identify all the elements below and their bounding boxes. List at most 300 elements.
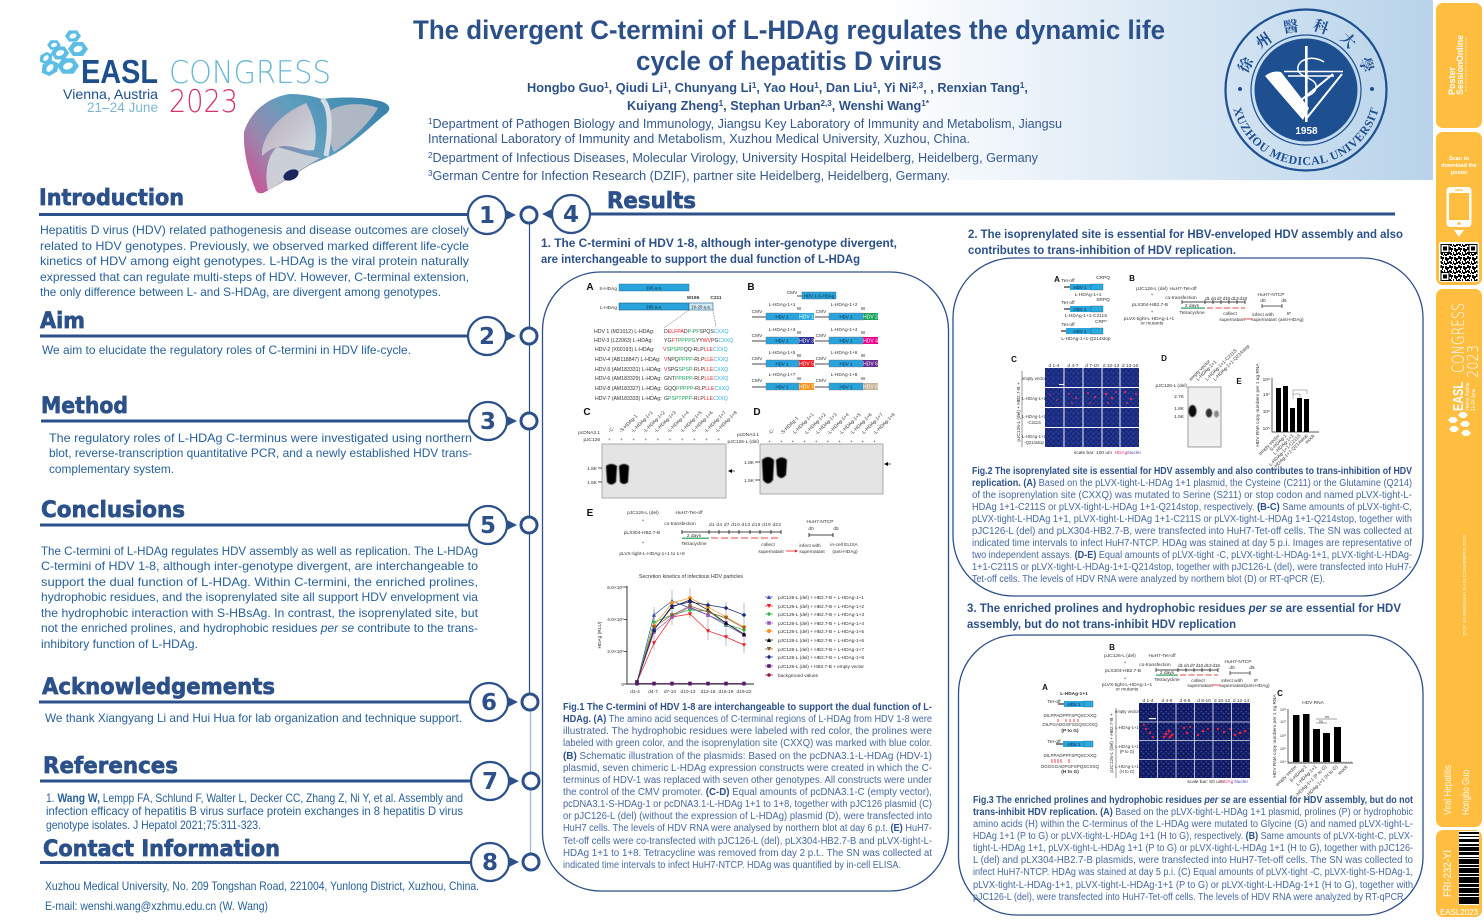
figure 2B: timeline: d5 — [1281, 298, 1287, 304]
authors: , Chunyang Li — [668, 81, 752, 95]
figure 2C: immunofluorescence grid: L-HDAg-1+1 — [1022, 396, 1046, 401]
figure 1E: experimental timeline: supernatant — [799, 549, 825, 555]
figure 2A: constructs: L-HDAg-1+1 — [1075, 292, 1102, 298]
result 2 heading: contributes to trans-inhibition of HDV replication. — [968, 243, 1236, 257]
figure 1C: northern blot: pcDNA3.1 — [578, 430, 600, 436]
figure 3B: timeline: supernatant — [1187, 683, 1213, 689]
figure 2B: timeline: HuH7-Tet-off — [1169, 286, 1197, 292]
figure 3A: mutation schematic: Tet-off — [1047, 699, 1061, 705]
figure 2B: timeline: pLVX-tight-L-HDAg-1+1 — [1124, 316, 1175, 322]
figure 3A: mutation schematic: DILPPADPPFSPQSCXXQ — [1044, 753, 1097, 758]
figure 1C: northern blot: -L-HDAg-1+3 — [653, 410, 678, 434]
figure 3B: immunofluorescence grid: L-HDAg-1+1 — [1115, 764, 1139, 769]
figure 3B: timeline: B — [1109, 643, 1115, 652]
plasmid columns: L-HDAg-1+2 — [831, 302, 858, 308]
figure 3A: mutation schematic: DILPPADPPFSPQSCXXQ — [1044, 713, 1097, 718]
figure 2C: immunofluorescence grid: L-HDAg-1+1 — [1022, 434, 1046, 439]
figure 3B: immunofluorescence grid: d 6-8 — [1180, 698, 1191, 704]
figure 1E: experimental timeline: pJC126-L (del) — [627, 510, 659, 516]
figure 1D: northern blot: 1.8K — [744, 460, 755, 466]
figure 1D: northern blot: -L-HDAg-1+8 — [872, 412, 897, 436]
figure 1 caption: indicated time intervals to infect HuH7-NTCP. HDAg was quantified by in-cell ELISA. — [563, 860, 901, 871]
plasmid columns: W — [861, 353, 866, 359]
section: introduction — [39, 186, 537, 299]
figure 2 caption: of the isoprenylation site (CXXQ) was mutated to Serine (S211) or stop codon and named pLVX-tight-L- — [972, 490, 1412, 501]
figure 1C: northern blot: -L-HDAg-1+4 — [666, 410, 691, 434]
figure 1D: northern blot: -C- — [767, 427, 776, 436]
figure 3B: immunofluorescence grid: d 12-14 — [1233, 698, 1249, 704]
figure 1D: northern blot: 1.5K — [744, 478, 755, 484]
figure 1E: secretion kinetics line chart: Secretion kinetics of infectious HDV particles — [639, 574, 743, 580]
figure 3B: timeline: or mutants — [1116, 686, 1139, 692]
figure 2C: immunofluorescence grid: d 13-16 — [1122, 363, 1138, 369]
figure 3 caption: infect HuH7-NTCP. HDAg was stained at day 5 p.i. (C) Equal amounts of pLVX-tight -C, pLVX-tight-S-HDAg-1, — [973, 867, 1413, 878]
figure 1E: experimental timeline: pLX304-HB2.7-B — [624, 530, 660, 536]
figure 2 caption: pLVX-tight-L-HDAg 1+1, pLVX-tight-L-HDAg 1+1-C211S or pLVX-tight-L-HDAg 1+1-Q214stop, together with — [972, 514, 1412, 525]
figure 2C: immunofluorescence grid: Nuclei — [1127, 450, 1141, 456]
marker 5: 5 — [480, 513, 496, 539]
figure 2C: immunofluorescence grid: scale bar: 100 um — [1074, 450, 1112, 456]
plasmid columns: L-HDAg-1+7 — [769, 372, 796, 378]
figure 2B: timeline: pJC126-L (del) — [1136, 286, 1168, 292]
figure 1E: experimental timeline: 2 days — [687, 533, 702, 539]
figure 3 caption: L (del) and pLX304-HB2.7-B plasmids, were transfected into HuH7-Tet-off cells. The SN was collected to — [973, 855, 1413, 866]
chart legend: pJC126-L (del) + HB2.7-B + L-HDAg-1+5 — [778, 629, 864, 635]
affiliations: 1 — [428, 117, 433, 126]
figure 1E: experimental timeline — [587, 508, 859, 557]
result 3 heading: assembly, but do not trans-inhibit HDV replication — [967, 617, 1236, 631]
authors: 1 — [1020, 81, 1025, 90]
figure 2E: bar chart: 10⁷ — [1263, 392, 1270, 398]
result 3 heading — [967, 601, 1401, 631]
section: conclusions: hydrophobic residues, and the isoprenylated site all support HDV envelopment via — [41, 590, 478, 604]
figure 3C: bar chart: 10⁵ — [1280, 746, 1286, 751]
figure 3B: timeline: Tetracycline — [1154, 677, 1180, 683]
figure 1E: secretion kinetics line chart: 6.0×10⁶ — [607, 585, 624, 591]
marker 3: 3 — [480, 409, 496, 435]
figure 2A: constructs: Tet-off — [1061, 300, 1075, 306]
barcode — [1459, 831, 1479, 905]
figure 3C: bar chart: 10⁸ — [1280, 707, 1286, 712]
figure 2B: timeline: or mutants — [1141, 320, 1164, 326]
plasmid columns: CMV — [816, 378, 827, 384]
authors: , Stephan Urban — [723, 99, 820, 113]
authors: , Qiudi Li — [609, 81, 663, 95]
figure 1A: sequence alignment: S-HDAg — [599, 286, 617, 292]
section: aim: Aim — [40, 309, 85, 334]
result 1 heading — [541, 236, 897, 266]
section: introduction: kinetics of HDV among eight genotypes. L-HDAg is the viral protein naturally — [40, 254, 469, 268]
figure 2D: northern blot: 1.8K — [1174, 406, 1185, 412]
figure 2E: bar chart: 10⁶ — [1263, 409, 1270, 415]
figure 3C: bar chart: L-HDAg-1+1 (P to G) — [1292, 764, 1329, 800]
marker 6 — [470, 683, 538, 721]
figure 1E: secretion kinetics line chart: d4-7 — [648, 689, 658, 695]
figure 1 caption: terminus of HDV-1 was replaced with seven other genotypes. All constructs were under — [563, 775, 933, 786]
section: contact information: Xuzhou Medical University, No. 209 Tongshan Road, 221004, Yunlong District, Xuzhou, China. — [45, 879, 479, 893]
affiliations: International Laboratory of Immunity and Metabolism, Xuzhou Medical University, Xuzhou, China. — [428, 132, 970, 146]
plasmid columns: W — [797, 330, 802, 336]
figure 2A: constructs: HDV 1 — [1074, 329, 1087, 334]
plasmid columns: W — [797, 376, 802, 382]
figure 1C: northern blot: pJC126 — [583, 437, 600, 443]
figure 2B: timeline: + — [1151, 293, 1154, 298]
figure 3B: immunofluorescence grid: HDAg — [1221, 779, 1234, 785]
section: introduction: Introduction — [39, 186, 184, 211]
figure 1 caption: or pJC126-L (del) (without the expression of L-HDAg) plasmid (D), were transfected into — [563, 811, 932, 822]
figure 1A: sequence alignment: HDV-4 (AB118847) L-HDAg: — [595, 357, 660, 363]
figure 1A: sequence alignment: VSPSPPQQ-RLPLLECXXQ — [663, 347, 728, 353]
figure 1A: sequence alignment: GPSPTPPP-RLPLLECXXQ — [664, 396, 728, 402]
figure 2D: northern blot: L-HDAg-1+1-Q214stop — [1212, 343, 1251, 382]
figure 1C: northern blot: 1.8K — [587, 466, 598, 472]
figure 3C: bar chart: ns — [1319, 718, 1323, 724]
plasmid columns: W — [861, 306, 866, 312]
figure 1A: sequence alignment: HDV 1 (M21012) L-HDAg: — [594, 329, 654, 335]
figure 3B: timeline: HuH7-Tet-off — [1148, 653, 1176, 659]
figure 3A: mutation schematic: L-HDAg-1+1 — [1060, 691, 1088, 697]
plasmid columns: CMV — [752, 378, 763, 384]
figure 2E: bar chart: empty vector — [1258, 433, 1282, 457]
authors: 2,3 — [820, 99, 832, 108]
figure 3C: bar chart: L-HDAg-1+1 (H to G) — [1303, 764, 1340, 800]
figure 3B: timeline: d5 — [1249, 665, 1255, 671]
figure 1D: northern blot: pJC126-L (del) — [727, 439, 759, 445]
figure 1 caption: Fig.1 The C-termini of HDV 1-8 are interchangeable to support the dual function of L- — [563, 702, 932, 713]
sidebar: EASL congress tab: Vienna, Austria — [1465, 382, 1471, 411]
figure 2B: timeline: Tetracycline — [1179, 310, 1205, 316]
sidebar: poster session online tab — [1436, 3, 1482, 128]
figure 2C: immunofluorescence grid: pJC126-L (del) + HB2.7-B + — [1016, 382, 1022, 442]
EASL Congress logo: 2023 — [169, 84, 238, 120]
figure 2D: northern blot: empty vector — [1188, 358, 1212, 382]
figure 2D: northern blot: pJC126-L (del) — [1155, 383, 1187, 389]
section: method: blot, reverse-transcription quantitative PCR, and a newly established HDV trans- — [49, 446, 472, 460]
figure 3B: timeline: + — [1124, 661, 1127, 666]
figure 1 caption: plasmid, seven chimeric L-HDAg expression constructs were created in which the C- — [563, 763, 932, 774]
figure 1E: experimental timeline: infect with — [799, 543, 821, 549]
section: conclusions: not the enriched prolines, and hydrophobic residues per se contribute to the trans- — [41, 621, 478, 635]
section: introduction: related to HDV genotypes. Previously, we observed marked different life-cycle — [40, 239, 469, 253]
marker 1 — [468, 196, 537, 234]
figure 1B: plasmid schematic — [747, 282, 878, 390]
figure 1D: northern blot: -L-HDAg-1+1 — [791, 412, 816, 436]
plasmid columns — [752, 302, 878, 390]
plasmid columns: HDV 1 — [799, 314, 814, 320]
figure 3B: timeline: 2 days — [1160, 670, 1175, 676]
sidebar: abstract ID tab with barcode — [1436, 830, 1482, 917]
title: The divergent C-termini of L-HDAg regulates the dynamic life — [413, 15, 1165, 45]
figure 1C: northern blot: -L-HDAg-1+5 — [679, 410, 704, 434]
plasmid columns: HDV 2 — [863, 314, 878, 320]
figure 1E: experimental timeline: + — [642, 519, 645, 524]
figure 1A: sequence alignment: GNTPPRPP-RLPLLECXXQ — [664, 376, 728, 382]
authors: Kuiyang Zheng — [627, 99, 717, 113]
plasmid columns: L-HDAg-1+5 — [769, 350, 796, 356]
plasmid columns: HDV 1 — [840, 362, 853, 366]
icon: liver illustration — [244, 94, 389, 193]
figure 2E: bar chart: E — [1236, 377, 1242, 386]
icon: hexagon cluster — [37, 30, 88, 79]
figure 2B: timeline: HuH7-NTCP — [1258, 292, 1284, 298]
figure 2 caption: replication. (A) Based on the pLVX-tight-L-HDAg 1+1 plasmid, the Cysteine (C211) or the Glutamine (Q214) — [972, 478, 1412, 489]
title: cycle of hepatitis D virus — [636, 46, 942, 76]
figure 1A: sequence alignment: 195 a.a. — [646, 304, 662, 310]
figure 3C: bar chart: C — [1277, 689, 1283, 698]
section: conclusions: the hydrophobic interaction with S-HBsAg. In contrast, the isoprenylated site, but — [41, 606, 479, 620]
figure 2C: immunofluorescence grid: HDAg — [1115, 450, 1128, 456]
figure 1C: northern blot: + + + + + + + + + + — [608, 438, 720, 443]
figure 1 caption: Tet-off cells were co-transfected with pJC126-L (del), pLX304-HB2.7-B and pLVX-tight-L- — [563, 836, 932, 847]
figure 1C: northern blot: -S-HDAg-1 — [618, 413, 639, 434]
figure 1A: sequence alignment: VNPQPPPP-RLPLLECXXQ — [664, 357, 728, 363]
sidebar: EASL congress tab: CONGRESS — [1449, 303, 1469, 373]
figure 2A: constructs: HDV 1 — [1074, 285, 1087, 290]
sidebar: EASL congress tab: 2023 — [1464, 345, 1482, 378]
figure 3A: mutation schematic: A — [1042, 683, 1048, 692]
figure 3C: bar chart: 10⁶ — [1280, 733, 1286, 738]
result 2 heading — [968, 227, 1403, 257]
figure 3A: mutation schematic: (H to G) — [1061, 769, 1079, 775]
authors: 1* — [921, 99, 930, 108]
authors: 1 — [752, 81, 757, 90]
chart legend: background values — [778, 673, 819, 679]
figure 1A: sequence alignment — [586, 282, 733, 402]
figure 2 caption: two independent assays. (D-E) Equal amounts of pLVX-tight -C, pLVX-tight-L-HDAg-1+1, pLVX-tight-L-HDAg- — [972, 550, 1412, 561]
figure 3C: bar chart: empty vector — [1275, 764, 1299, 788]
section: method — [41, 394, 537, 476]
EASL Congress logo — [37, 30, 331, 120]
figure 2B: timeline: 2 days — [1185, 303, 1200, 309]
marker 6: 6 — [481, 690, 497, 716]
figure 1 caption: (B) Schematic illustration of the plasmids: Based on the pcDNA3.1-L-HDAg (HDV-1) — [563, 751, 932, 762]
figure 2B: timeline: co-transfection — [1165, 295, 1197, 301]
figure 3B: timeline: d0 — [1229, 665, 1235, 671]
section: method: complementary system. — [49, 462, 174, 476]
figure 3C: bar chart: L-HDAg-1+1 — [1295, 764, 1319, 787]
figure 2D: northern blot: D — [1161, 354, 1167, 363]
plasmid columns: HDV 1 — [776, 384, 789, 390]
figure 3A: mutation schematic: HDV 1 — [1068, 742, 1081, 747]
section: references: genotype isolates. J Hepatol 2021;75:311-323. — [46, 818, 261, 832]
plasmid columns: L-HDAg-1+3 — [769, 327, 796, 333]
figure 3 caption — [973, 795, 1414, 903]
figure 2E: bar chart: 10⁸ — [1263, 377, 1270, 383]
figure 2B: timeline: collect — [1223, 311, 1237, 317]
figure 1D: northern blot: -L-HDAg-1+3 — [814, 412, 839, 436]
figure 2C: immunofluorescence grid: L-HDAg-1+1 — [1022, 414, 1046, 419]
marker 2 — [468, 317, 537, 355]
figure 2B: timeline: B — [1129, 274, 1135, 283]
plasmid columns: HDV 1 — [776, 362, 789, 366]
figure 1A: sequence alignment: VSPGSPSP-RLPLLECXXQ — [664, 367, 728, 373]
figure 3B: timeline: pJC126-L (del) — [1104, 653, 1136, 659]
authors: Hongbo Guo — [527, 81, 603, 95]
plasmid columns: HDV 1 — [840, 384, 853, 390]
plasmid columns: L-HDAg-1+6 — [831, 350, 858, 356]
marker 4: 4 — [563, 202, 579, 228]
plasmid columns: W — [861, 376, 866, 382]
figure 1A: sequence alignment: HDV-6 (AM183329) L-HDAg: — [595, 376, 662, 382]
section: conclusions: The C-termini of L-HDAg regulates HDV assembly as well as replication. The L-HDAg — [41, 544, 478, 558]
sidebar: scan to download tab: Scan to — [1449, 156, 1470, 162]
marker 7: 7 — [482, 769, 498, 795]
figure 2C: immunofluorescence grid: d 4-7 — [1068, 363, 1079, 369]
figure 3C: bar chart: 10⁴ — [1280, 759, 1286, 764]
figure 3B: timeline: collect — [1191, 678, 1205, 684]
figure 1E: secretion kinetics line chart: d7-10 — [664, 689, 676, 695]
figure 2C: immunofluorescence grid: -Q214stop — [1024, 440, 1044, 445]
figure 1E: experimental timeline: d5 — [833, 526, 839, 532]
figure 2 caption: HDAg 1+1-C211S or pLVX-tight-L-HDAg 1+1-Q214stop, respectively. (B-C) Same amounts of pLVX-tight-C, — [972, 502, 1412, 513]
figure 2 caption: Tet-off cells. The levels of HDV RNA were analyzed by northern blot (D) or RT-qPCR (E). — [972, 574, 1325, 585]
figure 1E: secretion kinetics line chart: HDAg (RLU) — [597, 621, 603, 648]
figure 1 caption: HuH7 cells. The levels of HDV RNA were analysed by northern blot at day 6 p.t. (E) HuH7- — [563, 823, 932, 834]
figure 2A: constructs: Tet-off — [1061, 278, 1075, 284]
figure 2B: timeline: IF — [1287, 311, 1291, 317]
authors: 1 — [719, 99, 724, 108]
sidebar: EASL congress tab: DOI: 10.5582/pson.EASLCONGRESS.2023 — [1462, 534, 1467, 635]
figure 1E: experimental timeline: Tetracycline — [681, 541, 707, 547]
chart legend: pJC126-L (del) + HB2.7-B + L-HDAg-1+6 — [778, 638, 864, 644]
figure 3B: immunofluorescence grid: d 10-12 — [1214, 698, 1230, 704]
authors: , Yi Ni — [877, 81, 912, 95]
plasmid columns: HDV 3 — [799, 338, 814, 344]
figure 1A: sequence alignment: HDV-2 (X60193) L-HDAg: — [595, 347, 654, 353]
figure 3B: timeline — [1102, 643, 1270, 692]
figure 3 caption: pLVX-tight-L-HDAg-1+1, pLVX-tight-L-HDAg-1+1 (P to G) or pLVX-tight-L-HDAg-1+1 (H to G), together with — [973, 880, 1413, 891]
figure 2D: northern blot: 2.7K — [1174, 394, 1185, 400]
figure 2B: timeline: d0 — [1260, 298, 1266, 304]
plasmid columns: HDV 1 — [776, 338, 789, 344]
icon: phone — [1446, 187, 1472, 227]
figure 1A: sequence alignment: GQQPPPPP-RLPLLECXXQ — [664, 386, 729, 392]
figure 2E: bar chart: L-HDAg-1+1-C211S — [1268, 433, 1302, 468]
figure 3 caption: trans-inhibit HDV replication. (A) Based on the pLVX-tight-L-HDAg 1+1 plasmid, prolines (P) or hydrophobic — [973, 807, 1413, 818]
figure 3B: timeline: supernatant — [1219, 683, 1245, 689]
figure 2D: northern blot: 1.5K — [1174, 414, 1185, 420]
figure 1D: northern blot — [727, 407, 897, 494]
figure 1E: secretion kinetics line chart: d19-22 — [737, 689, 752, 695]
marker 3 — [469, 402, 537, 440]
figure 3B: immunofluorescence grid: L-HDAg-1+1 — [1115, 725, 1139, 730]
marker 7 — [471, 762, 539, 800]
section: conclusions — [40, 498, 537, 651]
section: introduction: the only difference between L- and S-HDAg, are divergent among genotypes. — [40, 285, 441, 299]
figure 3B: immunofluorescence grid: empty vector — [1115, 709, 1140, 714]
figure 3 caption: Fig.3 The enriched prolines and hydrophobic residues per se are essential for HDV assembly, but do not — [973, 795, 1414, 806]
figure 1E: experimental timeline: in-cell ELISA — [830, 542, 859, 548]
figure 1D: northern blot: + + + + + + + + + + — [768, 440, 876, 445]
chart legend: pJC126-L (del) + HB2.7-B + L-HDAg-1+7 — [778, 647, 864, 653]
section: contact information: E-mail: wenshi.wang@xzhmu.edu.cn (W. Wang) — [45, 899, 268, 913]
authors — [527, 81, 1028, 113]
affiliations — [428, 117, 1062, 183]
sidebar: EASL congress tab — [1436, 289, 1482, 827]
figure 1E: experimental timeline: E — [587, 508, 594, 519]
figure 2 caption — [972, 466, 1412, 585]
marker 2: 2 — [479, 324, 495, 350]
figure 3C: bar chart: HDV RNA — [1302, 700, 1325, 706]
section: conclusions: C-termini of HDV 1-8, although inter-genotype divergent, are interchangeable to — [41, 559, 478, 573]
sidebar: abstract ID tab with barcode: FRI-232-YI — [1442, 850, 1454, 897]
figure 1D: northern blot: -S-HDAg-1 — [779, 415, 800, 436]
figure 1 caption: illustrated. The hydrophobic residues were labeled with red color, the prolines were — [563, 726, 932, 737]
section: method: The regulatory roles of L-HDAg C-terminus were investigated using northern — [49, 431, 472, 445]
chart legend: pJC126-L (del) + HB2.7-B + L-HDAg-1+3 — [778, 612, 864, 618]
figure 1C: northern blot: C — [583, 407, 591, 418]
figure 2A: constructs: CRP* — [1095, 319, 1107, 325]
affiliations: 3 — [428, 169, 433, 178]
marker 1: 1 — [479, 203, 495, 229]
figure 1E: experimental timeline: pLVX-tight-L-HDAg-1+1 to 1+8 — [619, 551, 685, 557]
plasmid columns: CMV — [752, 309, 763, 315]
figure 1D: northern blot: D — [753, 407, 761, 418]
figure 1E: secretion kinetics line chart: d1-4 — [630, 689, 640, 695]
section: acknowledgements — [39, 675, 538, 725]
section: conclusions: Conclusions — [41, 498, 185, 523]
title — [413, 15, 1165, 76]
affiliations: Department of Pathogen Biology and Immunology, Jiangsu Key Laboratory of Immunity and Metabolism, Jiangsu — [432, 117, 1062, 131]
figure 1E: experimental timeline: supernatant — [758, 549, 784, 555]
marker 5 — [469, 506, 537, 544]
sidebar: scan to download tab: poster — [1451, 170, 1468, 176]
figure 1E: secretion kinetics line chart: 4.0×10⁶ — [607, 617, 624, 623]
plasmid columns: CMV — [816, 309, 827, 315]
figure 2E: bar chart — [1236, 363, 1319, 472]
chart legend: pJC126-L (del) + HB2.7-B + L-HDAg-1+4 — [778, 621, 864, 627]
QR code — [1439, 242, 1479, 282]
result 2 heading: 2. The isoprenylated site is essential for HBV-enveloped HDV assembly and also — [968, 227, 1403, 241]
figure 2 caption: indicated time intervals to infect HuH7-NTCP. HDAg was stained at day 5 p.i. Images are representative of — [972, 538, 1412, 549]
chart legend: pJC126-L (del) + HB2.7-B + L-HDAg-1+1 — [778, 595, 864, 601]
figure 1C: northern blot — [578, 407, 739, 498]
plasmid columns: CMV — [752, 356, 763, 362]
figure 1A: sequence alignment: W196 — [687, 295, 700, 301]
figure 3C: bar chart: 10⁷ — [1280, 719, 1287, 724]
section: method: Method — [41, 394, 128, 419]
sidebar: EASL congress tab: EASL — [1450, 382, 1467, 411]
figure 2E: bar chart: L-HDAg-1+1 — [1272, 433, 1296, 456]
figure 1D: northern blot: -L-HDAg-1+7 — [860, 412, 885, 436]
figure 3C: bar chart: mock — [1337, 764, 1350, 777]
figure 3B: timeline: d1 d4 d7 d10 d13 d16 — [1178, 663, 1220, 669]
authors: 1 — [663, 81, 668, 90]
figure 1A: sequence alignment: HDV-7 (AM183333) L-HDAg: — [595, 396, 662, 402]
icon: Xuzhou Medical University seal — [1224, 8, 1388, 172]
affiliations: Department of Infectious Diseases, Molecular Virology, University Hospital Heidelberg, Heidelberg, Germany — [432, 151, 1039, 165]
panel: figure 3 — [958, 635, 1423, 915]
authors: 2,3 — [912, 81, 924, 90]
plasmid columns: HDV 6 — [863, 362, 878, 368]
chart legend: pJC126-L (del) + HB2.7-B + empty vector — [778, 664, 864, 670]
sidebar: scan to download tab — [1436, 132, 1482, 285]
figure 3C: bar chart: ns — [1325, 714, 1329, 719]
figure 2A: constructs: A — [1054, 275, 1060, 284]
plasmid columns: HDV 1 — [840, 314, 853, 320]
section: references: References — [43, 754, 178, 779]
figure 2C: immunofluorescence grid: C — [1011, 355, 1017, 364]
figure 2C: immunofluorescence grid: d 10-13 — [1103, 363, 1119, 369]
figure 2 caption: 1+1-C211S or pLVX-tight-L-HDAg-1+1-Q214stop, together with pJC126-L (del), were transfected into HuH7- — [972, 562, 1412, 573]
figure 1D: northern blot: -L-HDAg-1+4 — [826, 412, 851, 436]
authors: , — [1024, 81, 1028, 95]
figure 1E: experimental timeline: HuH7-Tet-off — [675, 510, 703, 516]
figure 2D: northern blot: L-HDAg-1+1 — [1195, 359, 1219, 382]
figure 3 caption: pJC126-L (del), were transfected into HuH7-Tet-off cells. The levels of HDV RNA were analyzed by RT-qPCR. — [973, 892, 1406, 903]
figure 1C: northern blot: -L-HDAg-1+6 — [690, 410, 715, 434]
plasmid columns: CMV — [816, 356, 827, 362]
